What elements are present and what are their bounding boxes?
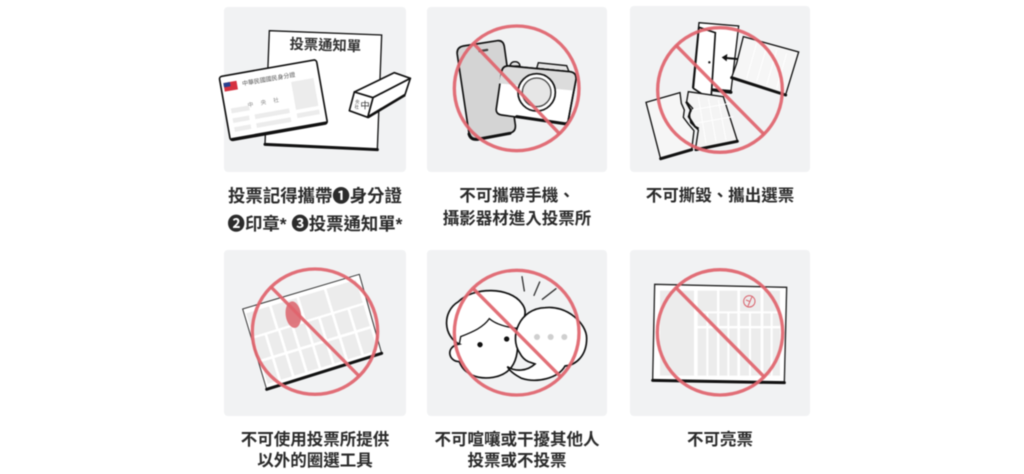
caption [241,429,389,470]
panel: no outside marking tools [224,250,406,470]
panel: no phones or cameras [427,7,607,228]
caption: 投票或不投票 [468,450,566,470]
torn ballot halves [646,92,737,159]
ballot slip on the right [732,37,799,95]
illustration: torn ballots with prohibition sign [646,23,799,159]
caption: 不可撕毀、攜出選票 [646,186,794,205]
panel: no showing ballot [630,250,810,449]
caption [228,186,403,234]
ballot [653,284,787,383]
red smudge [284,300,303,329]
voting notice sheet: 投票通知單 [289,35,361,55]
caption: ❷印章* ❸投票通知單* [228,214,403,234]
illustration: phone and camera with prohibition sign [454,26,579,151]
ID card [219,60,328,141]
ID card: 中央社 [247,94,287,109]
arrow [722,54,742,61]
caption: 不可使用投票所提供 [241,429,389,449]
illustration: voting notice, ID card and stamp [219,31,410,150]
prohibition sign [454,26,579,151]
stamp: 社 [355,104,360,111]
red stamp mark [744,296,755,307]
panel: bring ID, stamp and notice [219,7,410,234]
illustration: face and speech bubble with prohibition sign [447,270,587,395]
prohibition sign [657,270,783,395]
caption [443,185,591,228]
caption: 攝影器材進入投票所 [443,208,591,228]
illustration: ballot with red smudge and prohibition sign [243,269,382,394]
voting notice sheet [265,31,382,150]
flag [223,81,238,92]
emphasis marks [522,277,556,299]
panel: no noise or interfering [427,250,607,470]
ballot being folded out [693,23,739,100]
camera [496,62,576,124]
speech bubble [507,307,587,380]
caption: 不可攜帶手機、 [459,185,575,205]
ID card: 中華民國國民身分證 [241,71,296,88]
prohibition sign [252,269,378,394]
stamp: 央 [355,98,360,105]
prohibition sign [454,270,579,395]
caption: 不可喧嚷或干擾其他人 [434,429,600,449]
face [447,291,525,378]
caption [434,429,600,470]
illustration: marked ballot with prohibition sign [653,270,787,395]
caption: 投票記得攜帶❶身分證 [228,186,403,206]
stamp [349,73,410,117]
caption: 不可亮票 [687,429,753,449]
caption: 以外的圈選工具 [257,451,373,470]
panel: no tearing or removing ballots [630,6,810,205]
prohibition sign [658,28,782,152]
phone [457,41,515,139]
stamp: 中 [360,99,370,110]
ballot [243,274,382,389]
